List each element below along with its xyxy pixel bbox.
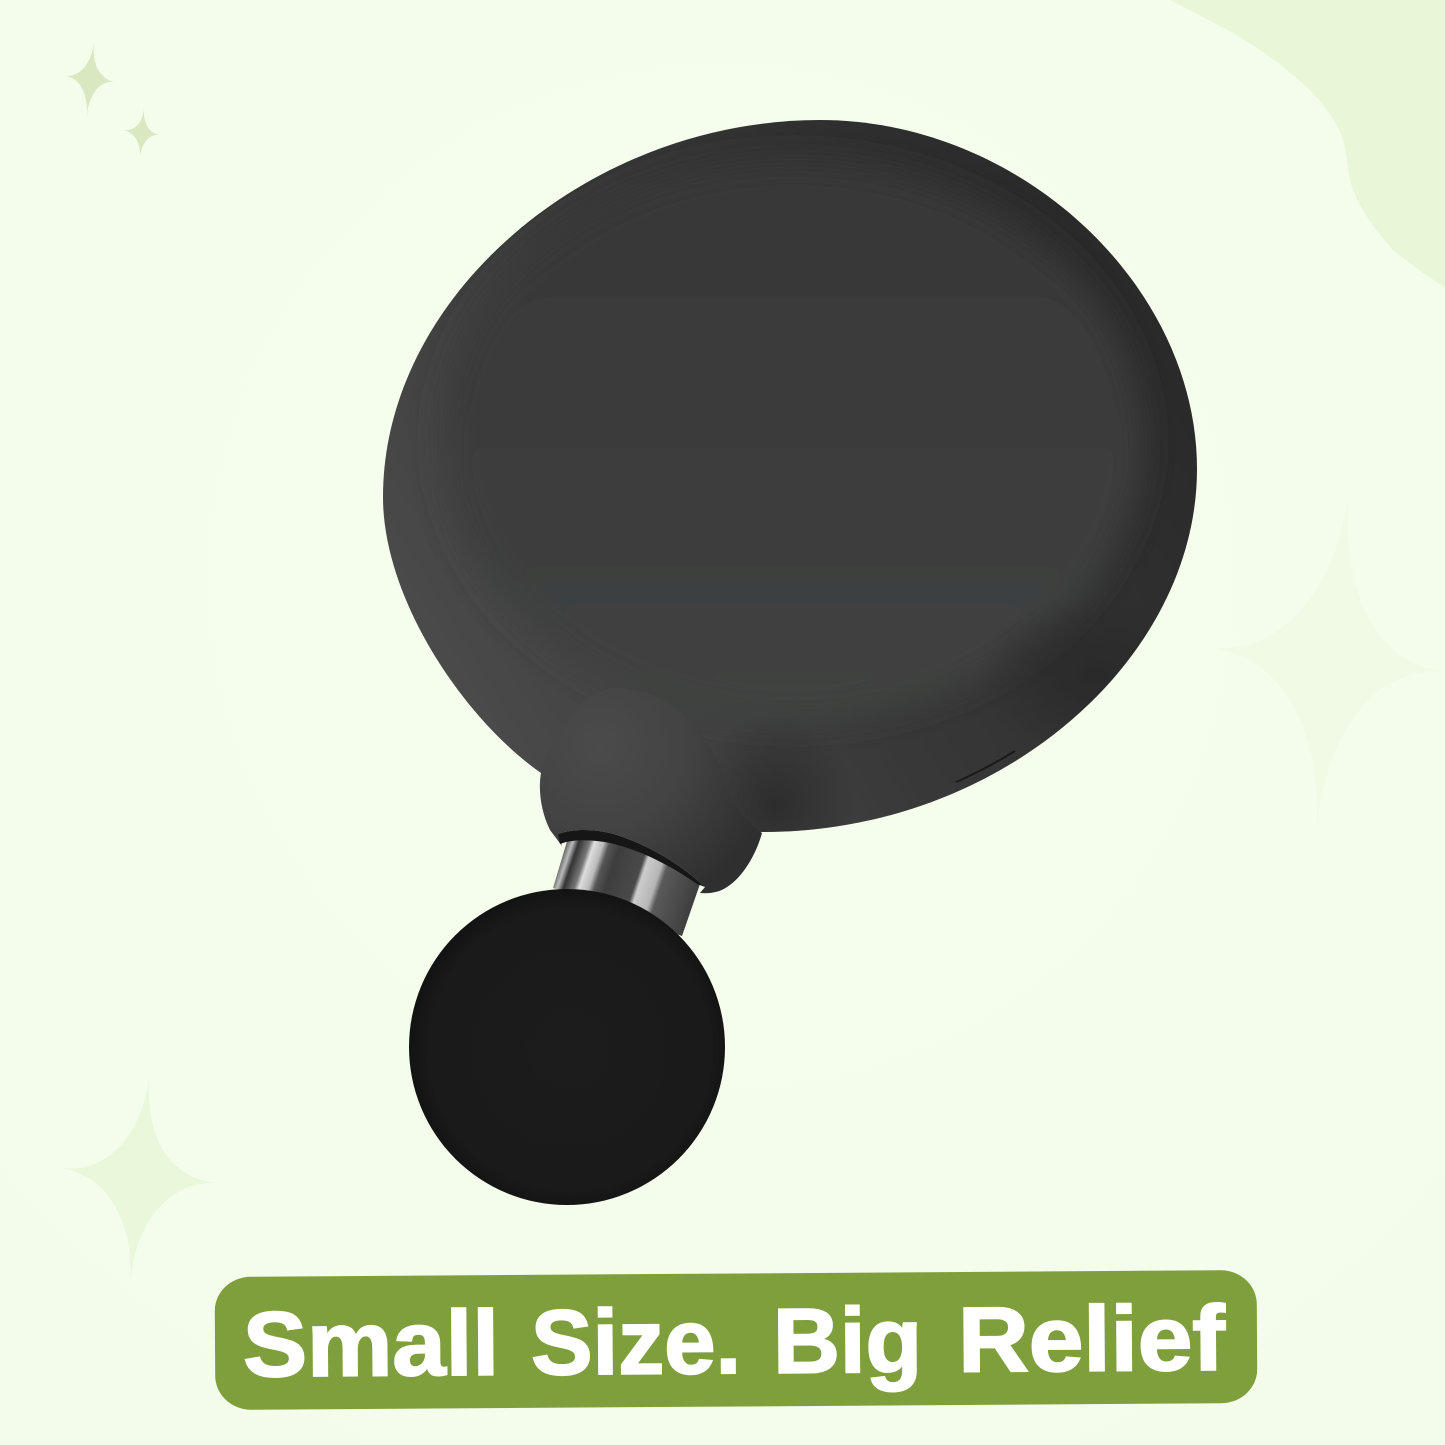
corner blob — [1170, 0, 1445, 287]
sparkle: top left small — [123, 108, 160, 158]
sparkle: right side — [1210, 485, 1445, 838]
headline text: Small — [243, 1293, 499, 1396]
sparkle: bottom left — [60, 1072, 218, 1285]
headline text: Relief — [958, 1288, 1226, 1392]
sparkle: top left large — [65, 42, 115, 117]
metal collar — [553, 838, 700, 936]
massage gun product — [370, 110, 1215, 1205]
head neck joint — [540, 688, 762, 893]
device body — [383, 120, 1197, 832]
label pill — [215, 1270, 1257, 1410]
massage ball head — [409, 889, 725, 1205]
pill background — [215, 1270, 1257, 1410]
headline text: Big — [773, 1290, 922, 1393]
collar recess — [558, 830, 705, 887]
side slot — [956, 751, 1015, 782]
headline text: Size. — [531, 1291, 741, 1394]
